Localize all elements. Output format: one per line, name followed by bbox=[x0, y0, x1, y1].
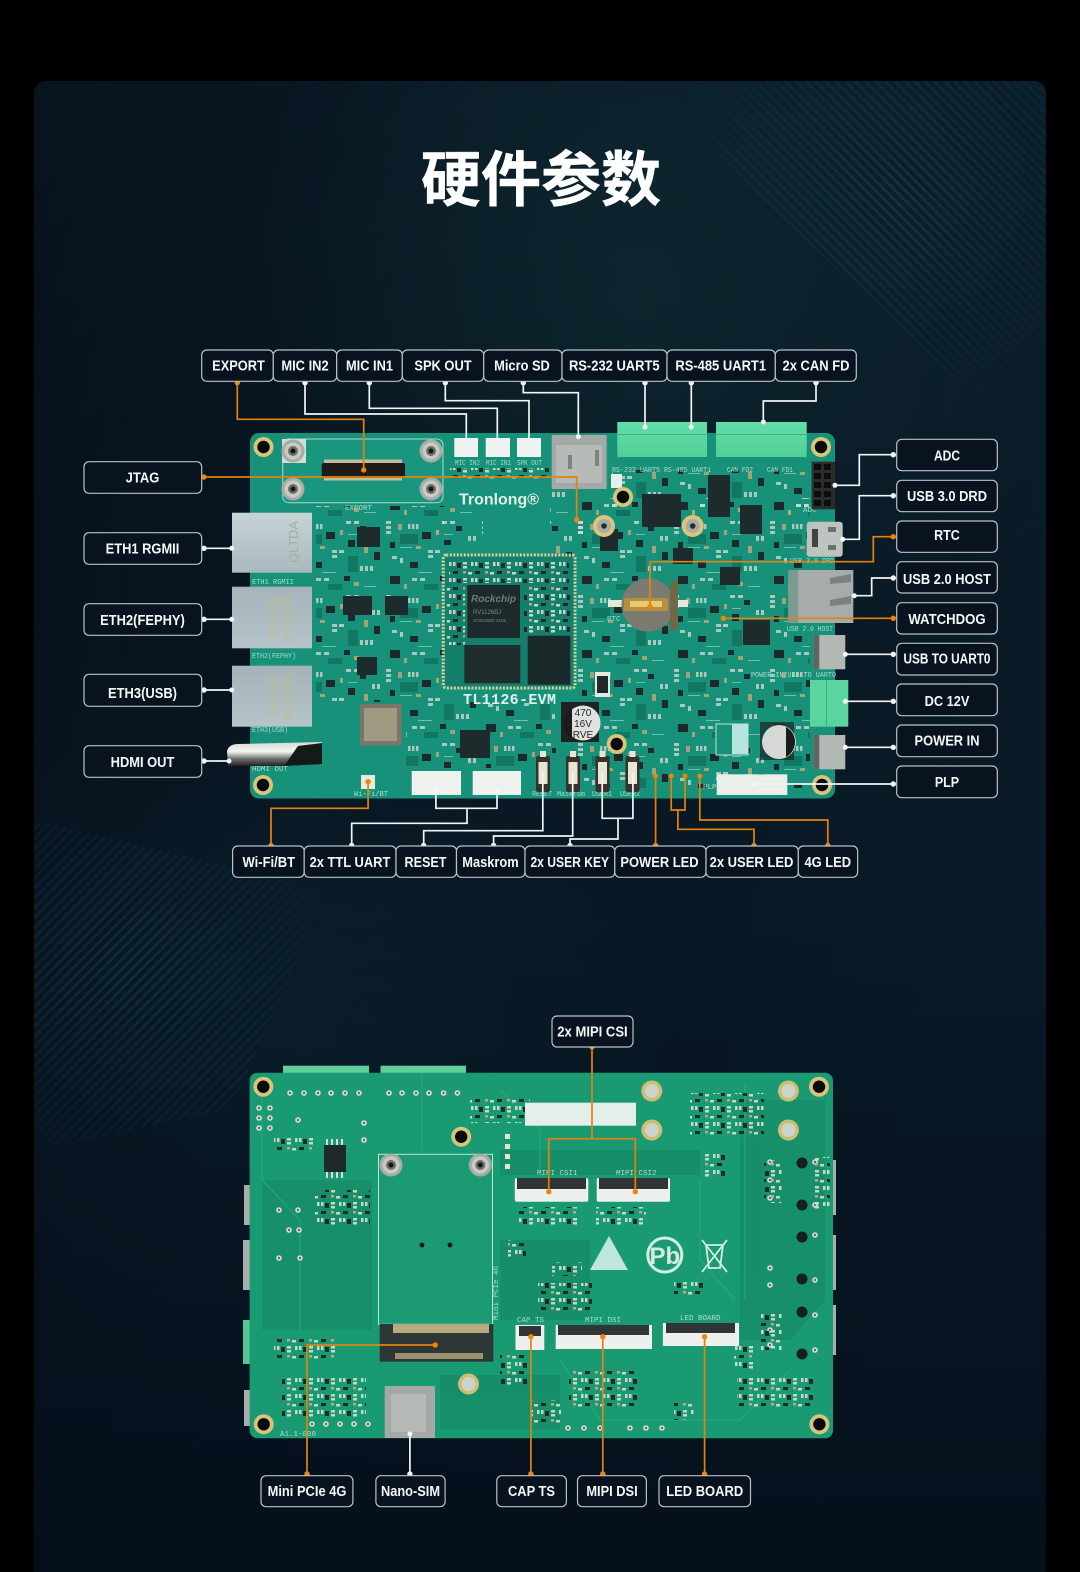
label: 2x USER KEY bbox=[525, 846, 615, 877]
labels: bottom board bbox=[261, 1016, 750, 1507]
label: LED BOARD: LED BOARD bbox=[666, 1484, 743, 1500]
silkscreen labels: USB 2.0 HOST bbox=[787, 626, 833, 634]
label: PLP bbox=[897, 766, 997, 798]
label: DC 12V: DC 12V bbox=[925, 694, 970, 710]
line: USB 3.0 bbox=[840, 493, 896, 542]
silkscreen labels: ETH1 RGMII bbox=[252, 579, 294, 587]
silkscreen labels: MIPI DSI bbox=[585, 1317, 621, 1325]
label: POWER IN: POWER IN bbox=[914, 734, 980, 750]
label: POWER LED bbox=[615, 846, 706, 877]
connectors: bottom edge of top board bbox=[268, 773, 830, 848]
label: POWER LED: POWER LED bbox=[620, 855, 699, 871]
icon: WEEE bin bbox=[702, 1240, 727, 1272]
line: USB TO UART0 bbox=[843, 652, 896, 657]
label: RTC bbox=[897, 521, 997, 552]
label: RTC: RTC bbox=[934, 528, 960, 544]
line: POWER LED bbox=[653, 774, 658, 848]
label: 2x USER LED: 2x USER LED bbox=[710, 855, 793, 871]
trace lines bbox=[262, 1074, 790, 1420]
line: 2x MIPI CSI bbox=[546, 1044, 638, 1194]
silkscreen labels: RS-485 UART1 bbox=[664, 467, 711, 475]
silkscreen labels: HDMI OUT bbox=[252, 766, 288, 774]
label: WATCHDOG bbox=[897, 603, 997, 634]
silkscreen labels: USER2 bbox=[620, 791, 640, 799]
silkscreen labels: MIC IN2 bbox=[455, 460, 480, 468]
line: RS-485 bbox=[689, 380, 694, 430]
LED BOARD connector bbox=[663, 1323, 739, 1346]
silkscreen labels: ADC bbox=[803, 507, 817, 515]
line: MIC IN2 bbox=[302, 380, 466, 440]
label: ETH3(USB): ETH3(USB) bbox=[108, 686, 177, 702]
label: Maskrom: Maskrom bbox=[462, 855, 519, 871]
ethernet jack ETH3: KRJ-125EHNL bbox=[283, 672, 293, 720]
label: EXPORT: EXPORT bbox=[212, 359, 265, 375]
line: ETH2 bbox=[201, 617, 234, 622]
silkscreen labels: SPK OUT bbox=[517, 460, 542, 468]
label: 2x USER KEY: 2x USER KEY bbox=[530, 855, 609, 871]
title: 硬件参数 bbox=[421, 147, 661, 214]
line: CAP TS bbox=[528, 1334, 534, 1477]
panel: bottom view circuit board bbox=[243, 1066, 836, 1439]
line: DC 12V bbox=[843, 699, 896, 704]
label: USB TO UART0: USB TO UART0 bbox=[904, 652, 990, 668]
label: Nano-SIM: Nano-SIM bbox=[381, 1484, 440, 1500]
label: RESET bbox=[396, 846, 456, 877]
power in type-C connector bbox=[813, 735, 845, 769]
label: JTAG bbox=[84, 462, 202, 493]
DC 12V terminal bbox=[810, 680, 848, 727]
copper pour shading bbox=[262, 1100, 825, 1430]
label: MIPI DSI: MIPI DSI bbox=[586, 1484, 638, 1500]
integrated circuits bbox=[343, 475, 770, 758]
connectors: top edge bbox=[235, 380, 819, 473]
micro SD slot bbox=[552, 435, 622, 489]
HDMI connector bbox=[227, 742, 322, 766]
terminal tabs bbox=[283, 1066, 466, 1074]
silkscreen labels: RESET bbox=[532, 791, 552, 799]
core module bbox=[443, 555, 575, 688]
electrolytic capacitor 470uF bbox=[561, 702, 600, 742]
label: 4G LED bbox=[798, 846, 858, 877]
board base bbox=[250, 433, 835, 798]
expansion outline and standoffs bbox=[282, 439, 443, 503]
line: PLP bbox=[752, 781, 896, 787]
line: CAN FD bbox=[761, 380, 819, 424]
label: HDMI OUT bbox=[84, 746, 202, 777]
SOP chip bbox=[324, 1139, 346, 1178]
label: ETH2(FEPHY): ETH2(FEPHY) bbox=[100, 613, 185, 629]
electrolytic capacitor 470uF: 16V bbox=[574, 719, 592, 730]
silkscreen labels: MIC IN1 bbox=[486, 460, 511, 468]
connectors: bottom board bbox=[304, 1044, 707, 1477]
2x5 ADC header bbox=[812, 462, 835, 509]
line: SPK OUT bbox=[443, 380, 529, 440]
label: USB TO UART0 bbox=[897, 643, 997, 675]
line: Mini PCIe 4G bbox=[304, 1342, 438, 1477]
ethernet jack ETH3: DGKYD bbox=[266, 676, 282, 716]
power module outline bbox=[716, 724, 748, 755]
label: ADC: ADC bbox=[934, 448, 960, 464]
ethernet jack ETH1: QLTDA bbox=[286, 521, 301, 563]
label: SPK OUT: SPK OUT bbox=[414, 359, 472, 375]
ethernet jack ETH3 bbox=[232, 666, 312, 727]
label: Wi-Fi/BT: Wi-Fi/BT bbox=[242, 855, 295, 871]
line: 4G LED bbox=[697, 774, 830, 848]
silkscreen labels: CAP TS bbox=[517, 1317, 545, 1325]
mic and speaker plugs bbox=[454, 438, 541, 457]
silkscreen labels: LED BOARD bbox=[680, 1315, 721, 1323]
label: EXPORT bbox=[202, 350, 273, 381]
tactile buttons bbox=[536, 751, 640, 792]
silkscreen labels: CAN FD2 bbox=[727, 467, 753, 475]
mini PCIe outline: Mini PCIe 4G bbox=[493, 1265, 501, 1320]
flash chip bbox=[528, 636, 570, 685]
label: RS-232 UART5: RS-232 UART5 bbox=[569, 359, 660, 375]
electrolytic capacitor 330uF bbox=[760, 722, 796, 760]
silkscreen labels: PLP bbox=[703, 784, 717, 792]
label: USB 3.0 DRD bbox=[897, 480, 997, 512]
label: Maskrom bbox=[456, 846, 525, 877]
line: EXPORT bbox=[235, 380, 366, 473]
USB to UART type-C connector bbox=[813, 635, 845, 669]
terminal block: RS-232 / RS-485 bbox=[617, 422, 707, 457]
ethernet jack ETH2: KRJ-125EHNL bbox=[283, 593, 293, 641]
label: ETH1 RGMII bbox=[84, 533, 202, 564]
PLP connector bbox=[717, 774, 787, 795]
label: 2x TTL UART bbox=[304, 846, 396, 877]
label: USB 2.0 HOST bbox=[897, 562, 997, 593]
labels: left column bbox=[84, 462, 202, 777]
line: JTAG bbox=[201, 474, 579, 523]
connectors: right edge bbox=[647, 452, 896, 787]
label: WATCHDOG: WATCHDOG bbox=[908, 612, 986, 628]
label: ETH2(FEPHY) bbox=[84, 604, 202, 635]
ethernet jack ETH2: DGKYD bbox=[266, 598, 282, 638]
TTL UART connectors bbox=[412, 771, 521, 795]
silkscreen labels: RS-232 UART5 bbox=[612, 467, 660, 475]
line: MIC IN1 bbox=[367, 380, 497, 440]
ethernet jack ETH1 bbox=[232, 513, 312, 573]
SoC chip: Rockchip bbox=[471, 594, 516, 605]
line: RS-232 bbox=[642, 380, 648, 430]
icon: ESD warning bbox=[590, 1236, 628, 1270]
silkscreen labels: Wi-Fi/BT bbox=[354, 791, 388, 799]
board name: TL1126-EVM bbox=[463, 692, 556, 709]
label: JTAG: JTAG bbox=[126, 471, 159, 487]
label: USB 2.0 HOST: USB 2.0 HOST bbox=[903, 572, 991, 588]
line: 2x TTL UART bbox=[349, 788, 500, 848]
label: POWER IN bbox=[897, 725, 997, 757]
line: ETH3 bbox=[201, 687, 234, 693]
USB 2.0 host connector bbox=[788, 570, 853, 623]
line: WATCHDOG bbox=[721, 616, 896, 621]
label: SPK OUT bbox=[402, 350, 484, 381]
SoC chip bbox=[467, 585, 520, 638]
diode bbox=[595, 672, 610, 697]
line: Maskrom bbox=[491, 773, 573, 848]
line: HDMI bbox=[201, 758, 232, 764]
Wi-Fi module bbox=[360, 704, 402, 746]
label: DC 12V bbox=[897, 684, 997, 716]
silkscreen labels: A1.1-000 bbox=[280, 1431, 317, 1439]
export connector bbox=[322, 460, 405, 480]
MIPI CSI connectors bbox=[515, 1178, 670, 1202]
silkscreen labels: EXPORT bbox=[345, 505, 373, 513]
label: 2x CAN FD: 2x CAN FD bbox=[782, 359, 850, 375]
connectors: left edge bbox=[201, 474, 579, 764]
label: CAP TS bbox=[497, 1476, 566, 1507]
line: MIPI DSI bbox=[600, 1334, 606, 1477]
label: 2x TTL UART: 2x TTL UART bbox=[310, 855, 391, 871]
label: MIC IN2: MIC IN2 bbox=[281, 359, 329, 375]
black push nodes bbox=[796, 1158, 808, 1360]
label: Micro SD bbox=[484, 350, 562, 381]
icon: lead free: Pb bbox=[649, 1243, 680, 1270]
label: RS-485 UART1: RS-485 UART1 bbox=[675, 359, 766, 375]
silkscreen labels: ETH3(USB) bbox=[252, 727, 288, 735]
label: PLP: PLP bbox=[935, 775, 959, 791]
panel: top view circuit board bbox=[227, 422, 853, 799]
label: USB 3.0 DRD: USB 3.0 DRD bbox=[907, 489, 987, 505]
label: Micro SD: Micro SD bbox=[494, 359, 550, 375]
line: POWER IN bbox=[843, 745, 896, 750]
electrolytic capacitor 470uF: 470 bbox=[575, 708, 592, 719]
label: MIC IN1: MIC IN1 bbox=[346, 359, 393, 375]
label: RESET: RESET bbox=[404, 855, 447, 871]
silkscreen labels: POWER IN/USB TO UART0 bbox=[751, 672, 836, 680]
label: ETH1 RGMII: ETH1 RGMII bbox=[106, 542, 179, 558]
label: 4G LED: 4G LED bbox=[804, 855, 851, 871]
silkscreen labels: USER1 bbox=[592, 791, 612, 799]
line: USB 2.0 bbox=[852, 575, 896, 598]
line: Wi-Fi/BT bbox=[268, 779, 371, 848]
line: RTC bbox=[647, 534, 896, 609]
CAP TS connector bbox=[516, 1325, 544, 1350]
label: LED BOARD bbox=[659, 1476, 750, 1507]
line: ADC bbox=[832, 452, 896, 488]
DC terminal side bbox=[243, 1320, 252, 1364]
label: Mini PCIe 4G: Mini PCIe 4G bbox=[268, 1484, 346, 1500]
silkscreen labels bbox=[280, 1170, 721, 1439]
label: 2x CAN FD bbox=[775, 350, 856, 381]
silkscreen labels: USB 3.0 DRD bbox=[790, 558, 834, 566]
silkscreen labels: CAN FD1 bbox=[767, 467, 793, 475]
side connectors bbox=[243, 1160, 836, 1426]
line: Nano-SIM bbox=[407, 1432, 413, 1477]
label: Mini PCIe 4G bbox=[261, 1476, 353, 1507]
labels: top row bbox=[202, 350, 856, 381]
electrolytic capacitor 470uF: RVE bbox=[573, 730, 594, 741]
RTC battery holder bbox=[608, 578, 688, 632]
label: ETH3(USB) bbox=[84, 674, 202, 706]
label: 2x MIPI CSI bbox=[552, 1016, 633, 1047]
MIPI DSI connector bbox=[556, 1325, 652, 1349]
brand text: Tronlong® bbox=[459, 492, 539, 508]
label: RS-232 UART5 bbox=[562, 350, 667, 381]
label: MIC IN1 bbox=[337, 350, 402, 381]
board base bbox=[250, 1073, 833, 1438]
through hole pin rows bbox=[256, 1090, 818, 1431]
line: ETH1 bbox=[201, 546, 234, 551]
line: RESET bbox=[421, 773, 543, 848]
terminal block: CAN FD bbox=[716, 422, 807, 457]
label: RS-485 UART1 bbox=[667, 350, 775, 381]
SoC chip: RV1126BJ bbox=[473, 610, 501, 616]
line: Micro SD bbox=[521, 380, 581, 439]
line: LED BOARD bbox=[702, 1334, 707, 1477]
line: 2x USER KEY bbox=[567, 773, 633, 848]
mini PCIe outline bbox=[378, 1154, 501, 1324]
label: HDMI OUT: HDMI OUT bbox=[111, 755, 174, 771]
component clusters bbox=[274, 1093, 830, 1423]
silkscreen labels: Maskrom bbox=[557, 791, 585, 799]
mounting holes bbox=[253, 437, 832, 795]
label: MIC IN2 bbox=[273, 350, 337, 381]
silkscreen labels: RTC bbox=[607, 616, 621, 624]
labels: bottom row of top board bbox=[233, 846, 858, 877]
label: 2x MIPI CSI: 2x MIPI CSI bbox=[557, 1024, 628, 1040]
Wi-Fi antenna socket bbox=[361, 775, 375, 789]
SoC chip: JC8M4505 2155 bbox=[473, 618, 507, 623]
ethernet jack ETH2 bbox=[232, 587, 312, 648]
label: MIPI DSI bbox=[578, 1476, 646, 1507]
white label patch bbox=[525, 1103, 636, 1126]
Nano-SIM slot bbox=[385, 1386, 435, 1438]
line: 2x USER LED bbox=[669, 774, 757, 848]
silkscreen labels: ETH2(FEPHY) bbox=[252, 653, 296, 661]
DDR chip bbox=[464, 645, 520, 683]
silkscreen labels bbox=[252, 460, 836, 799]
mini PCIe slot bbox=[380, 1324, 493, 1362]
USB 3.0 type-C connector bbox=[807, 522, 843, 557]
component clutter bbox=[316, 468, 810, 788]
label: Nano-SIM bbox=[376, 1476, 445, 1507]
mounting holes bbox=[253, 1077, 829, 1434]
silkscreen labels: MIPI CSI2 bbox=[616, 1170, 657, 1178]
label: ADC bbox=[897, 439, 997, 471]
label: 2x USER LED bbox=[706, 846, 798, 877]
label: Wi-Fi/BT bbox=[233, 846, 304, 877]
labels: right column bbox=[897, 439, 997, 798]
silkscreen labels: MIPI CSI1 bbox=[537, 1170, 578, 1178]
label: CAP TS: CAP TS bbox=[508, 1484, 555, 1500]
test points bbox=[505, 1134, 510, 1169]
